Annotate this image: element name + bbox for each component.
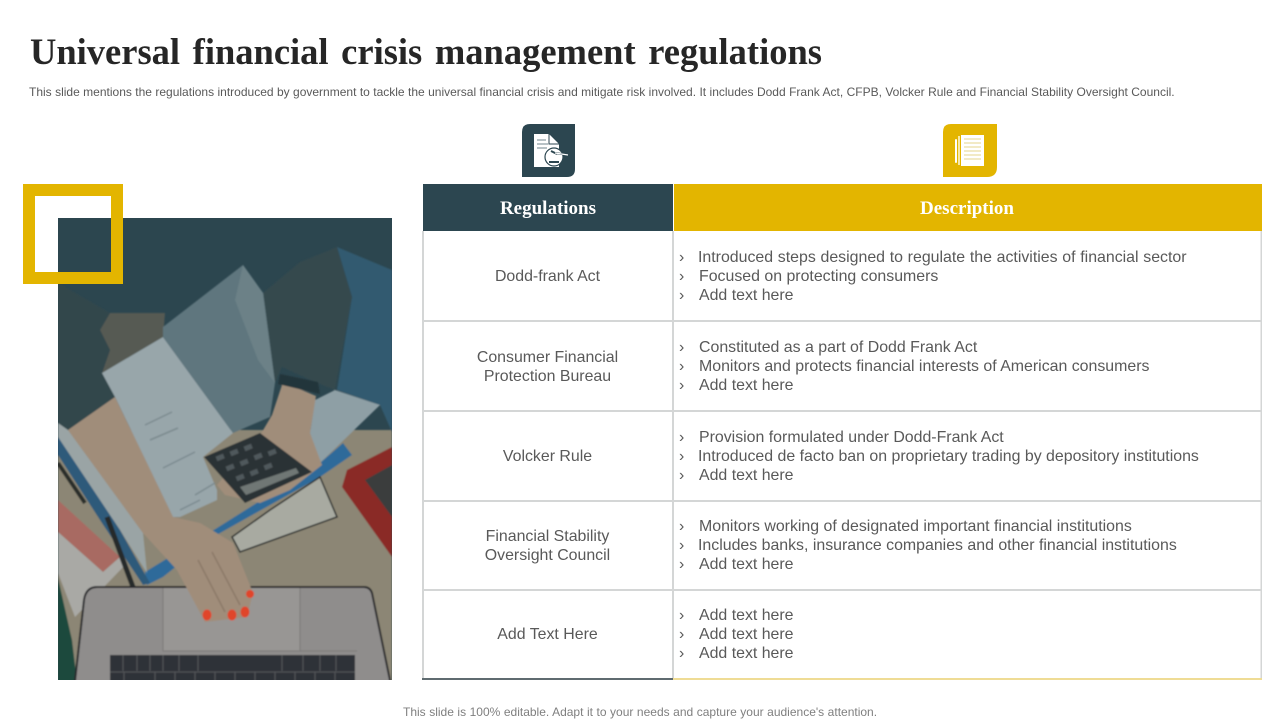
- icon: description pages: [943, 124, 997, 177]
- row 5 description: Add text here: [699, 607, 794, 624]
- photo: hands with calculator and laptop: [58, 218, 392, 680]
- row 3 description: ›: [679, 429, 684, 446]
- row 3 description: Introduced de facto ban on proprietary trading by depository institutions: [698, 448, 1199, 465]
- row 1 description: [679, 249, 1187, 304]
- header: description: [674, 184, 1262, 231]
- lifted page: [163, 265, 275, 433]
- row 1 description: ›: [679, 249, 684, 266]
- row 5 description: Add text here: [699, 645, 794, 662]
- left books: [58, 500, 120, 572]
- page text lines: [145, 412, 215, 510]
- row 2 description: Add text here: [699, 377, 794, 394]
- icon: regulations document with gavel: [522, 124, 575, 177]
- row 5 label: Add Text Here: [497, 626, 598, 643]
- main page: [102, 337, 233, 517]
- row 2 description: ›: [679, 377, 684, 394]
- wrist strap: [278, 374, 320, 394]
- row 3 description: Add text here: [699, 467, 794, 484]
- row 4 label: Financial Stability: [486, 528, 609, 545]
- row 2 description: ›: [679, 358, 684, 375]
- header: description: Description: [920, 198, 1014, 219]
- row 3 description: Provision formulated under Dodd-Frank Act: [699, 429, 1004, 446]
- row 1 label: Dodd-frank Act: [495, 268, 600, 285]
- lower paper: [232, 477, 337, 552]
- row 1 description: Focused on protecting consumers: [699, 268, 938, 285]
- row 1 description: Add text here: [699, 287, 794, 304]
- header: regulations: [423, 184, 673, 231]
- desk: [58, 430, 392, 690]
- table: regulations and description: [422, 184, 1262, 680]
- left sleeve: [58, 283, 115, 430]
- folder strip: [145, 443, 352, 585]
- row 1 description: ›: [679, 287, 684, 304]
- footer note: This slide is 100% editable. Adapt it to your needs and capture your audience's attention.: [403, 705, 877, 719]
- row 3 label: Volcker Rule: [503, 448, 592, 465]
- header: regulations: Regulations: [500, 198, 596, 219]
- row 4 description: ›: [679, 556, 684, 573]
- calculator: [204, 433, 312, 503]
- row 2 description: Monitors and protects financial interests of American consumers: [699, 358, 1149, 375]
- yellow square frame: [23, 184, 123, 284]
- row 4 description: Add text here: [699, 556, 794, 573]
- right books: [342, 447, 392, 557]
- right paper: [310, 390, 380, 463]
- page strip and edge left of arm: [58, 423, 147, 573]
- right hand: [217, 382, 322, 503]
- row 2 description: Constituted as a part of Dodd Frank Act: [699, 339, 977, 356]
- row 1 description: Introduced steps designed to regulate the activities of financial sector: [698, 249, 1187, 266]
- row 3 description: [679, 429, 1199, 484]
- right sleeve: [263, 247, 352, 390]
- row 5 description: [679, 607, 794, 662]
- row 4 description: Includes banks, insurance companies and other financial institutions: [698, 537, 1177, 554]
- row 3 description: ›: [679, 467, 684, 484]
- row 5 description: ›: [679, 607, 684, 624]
- row 2 description: [679, 339, 1149, 394]
- row 5 description: ›: [679, 626, 684, 643]
- row 2 description: ›: [679, 339, 684, 356]
- row 2 label: [477, 349, 618, 385]
- row 1 description: ›: [679, 268, 684, 285]
- row 3 description: ›: [679, 448, 684, 465]
- title: Universal financial crisis management regulations: [30, 31, 822, 72]
- hand over laptop: [177, 523, 253, 622]
- row 5 description: ›: [679, 645, 684, 662]
- row 4 description: ›: [679, 518, 684, 535]
- left arm and hand: [68, 397, 253, 622]
- row 2 label: Protection Bureau: [484, 368, 611, 385]
- row 4 description: Monitors working of designated important financial institutions: [699, 518, 1132, 535]
- table grid lines: [422, 231, 1262, 680]
- blue folder: [337, 247, 392, 432]
- row 4 description: [679, 518, 1177, 573]
- row 5 description: Add text here: [699, 626, 794, 643]
- subtitle text: This slide mentions the regulations introduced by government to tackle the universal financial crisis and mitigate risk involved. It includes Dodd Frank Act, CFPB, Volcker Rule and Financial Stability Oversight Council.: [29, 85, 1175, 99]
- desk glimpse between sleeves: [100, 313, 165, 373]
- row 4 label: [485, 528, 610, 564]
- row 2 label: Consumer Financial: [477, 349, 618, 366]
- laptop: [74, 587, 392, 690]
- row 4 label: Oversight Council: [485, 547, 610, 564]
- row 4 description: ›: [679, 537, 684, 554]
